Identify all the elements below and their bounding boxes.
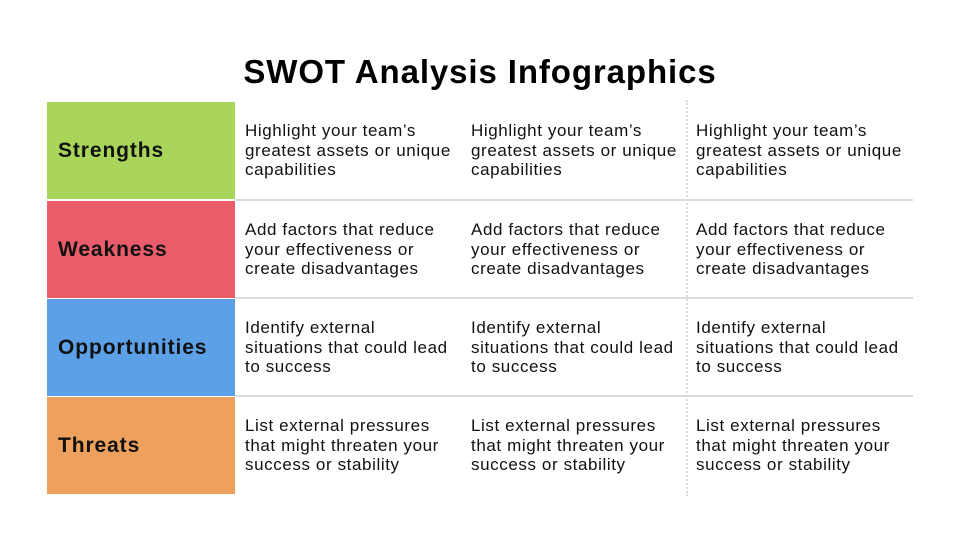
text: opportunities col3: Identify external	[696, 318, 826, 337]
text: strengths col1: capabilities	[245, 160, 336, 179]
text: weakness col3: Add factors that reduce	[696, 220, 886, 239]
row: strengths	[47, 102, 902, 199]
label: weakness: Weakness	[58, 238, 168, 260]
text: weakness col2: your effectiveness or	[471, 240, 640, 258]
text: opportunities col3: situations that could lead	[696, 338, 899, 356]
text: opportunities col1: Identify external	[245, 318, 375, 337]
text: threats col3: that might threaten your	[696, 436, 890, 454]
text: strengths col3: Highlight your team’s	[696, 121, 867, 140]
text: strengths col3: greatest assets or unique	[696, 140, 902, 160]
text: threats col2: List external pressures	[471, 416, 656, 435]
text: opportunities col1: situations that could lead	[245, 338, 448, 356]
text: threats col2	[471, 416, 665, 474]
title: SWOT Analysis Infographics	[243, 53, 717, 90]
text: strengths col1: Highlight your team’s	[245, 121, 416, 140]
text: threats col3: List external pressures	[696, 416, 881, 435]
text: strengths col3	[696, 121, 902, 179]
text: threats col1: that might threaten your	[245, 436, 439, 454]
text: weakness col2: create disadvantages	[471, 259, 645, 278]
text: weakness col1: Add factors that reduce	[245, 220, 435, 239]
text: weakness col3: your effectiveness or	[696, 240, 865, 258]
text: strengths col1: greatest assets or unique	[245, 140, 451, 160]
label: threats	[47, 397, 235, 494]
text: threats col2: success or stability	[471, 455, 626, 474]
label: strengths	[47, 102, 235, 199]
text: opportunities col2: to success	[471, 357, 557, 376]
text: threats col1: success or stability	[245, 455, 400, 474]
text: weakness col2	[471, 220, 661, 278]
label: strengths: Strengths	[58, 138, 164, 162]
text: strengths col2: greatest assets or unique	[471, 140, 677, 160]
label: weakness	[47, 201, 235, 298]
text: opportunities col2: Identify external	[471, 318, 601, 337]
text: weakness col3: create disadvantages	[696, 259, 870, 278]
text: opportunities col2: situations that could lead	[471, 338, 674, 356]
row: opportunities	[47, 299, 899, 396]
row: threats	[47, 397, 890, 494]
text: threats col1: List external pressures	[245, 416, 430, 435]
text: opportunities col1	[245, 318, 448, 376]
text: threats col1	[245, 416, 439, 474]
label: opportunities	[47, 299, 235, 396]
text: threats col2: that might threaten your	[471, 436, 665, 454]
text: strengths col2	[471, 121, 677, 179]
label: threats: Threats	[58, 434, 140, 456]
label: opportunities: Opportunities	[58, 336, 207, 358]
row: weakness	[47, 201, 886, 298]
text: strengths col2: Highlight your team’s	[471, 121, 642, 140]
text: opportunities col1: to success	[245, 357, 331, 376]
text: weakness col3	[696, 220, 886, 278]
text: weakness col2: Add factors that reduce	[471, 220, 661, 239]
text: weakness col1	[245, 220, 435, 278]
text: weakness col1: your effectiveness or	[245, 240, 414, 258]
text: strengths col2: capabilities	[471, 160, 562, 179]
text: threats col3	[696, 416, 890, 474]
text: threats col3: success or stability	[696, 455, 851, 474]
text: weakness col1: create disadvantages	[245, 259, 419, 278]
text: opportunities col3	[696, 318, 899, 376]
text: strengths col1	[245, 121, 451, 179]
text: strengths col3: capabilities	[696, 160, 787, 179]
text: opportunities col3: to success	[696, 357, 782, 376]
text: opportunities col2	[471, 318, 674, 376]
